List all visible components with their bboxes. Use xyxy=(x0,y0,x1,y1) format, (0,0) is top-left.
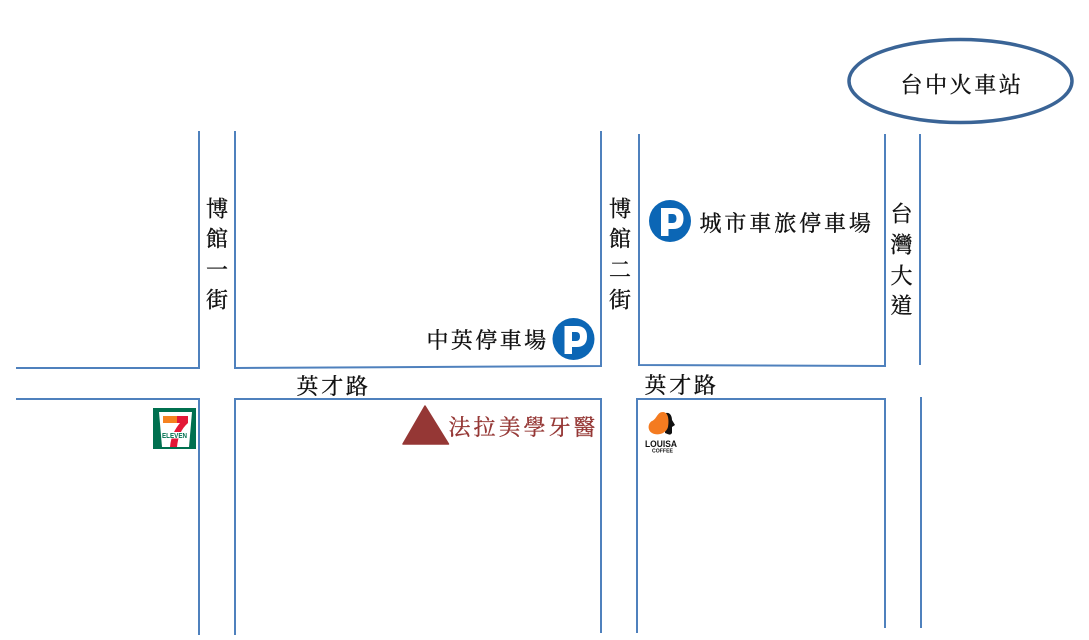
street label: Taiwan Blvd: 台 xyxy=(890,202,913,226)
street label: Yingcai Rd right: 英才路 xyxy=(644,373,719,398)
parking: Zhongying car park xyxy=(426,318,594,360)
destination marker: Fala dental clinic xyxy=(403,406,599,444)
destination marker: Fala dental clinic: 法拉美學牙醫 xyxy=(448,415,599,440)
logo: Louisa Coffee: LOUISA xyxy=(645,439,677,449)
landmark: Taichung station xyxy=(849,40,1072,122)
street label: Taiwan Blvd: 道 xyxy=(890,294,913,318)
street label: Bo Guan 1st St: 街 xyxy=(206,288,228,312)
road network xyxy=(16,131,921,635)
street label: Bo Guan 1st St: 館 xyxy=(206,226,228,252)
street label: Bo Guan 2nd St: 二 xyxy=(609,258,631,282)
parking: Zhongying car park: 中英停車場 xyxy=(426,328,549,353)
street label: Bo Guan 2nd St: 館 xyxy=(609,226,631,252)
logo: 7-Eleven xyxy=(153,408,196,449)
parking: City Hotel car park: 城市車旅停車場 xyxy=(700,211,874,236)
street label: Yingcai Rd left: 英才路 xyxy=(296,374,371,399)
parking: City Hotel car park xyxy=(649,200,874,242)
street label: Bo Guan 1st St: 博 xyxy=(206,196,228,222)
street label: Bo Guan 2nd St: 博 xyxy=(609,196,631,222)
street label: Bo Guan 1st St: 一 xyxy=(206,258,228,282)
logo: Louisa Coffee xyxy=(645,412,677,454)
street label: Taiwan Blvd: 大 xyxy=(890,264,913,288)
logo: 7-Eleven: ELEVEN xyxy=(162,433,187,440)
logo: Louisa Coffee: COFFEE xyxy=(652,448,674,454)
street label: Taiwan Blvd: 灣 xyxy=(890,232,913,258)
street label: Bo Guan 2nd St: 街 xyxy=(609,288,631,312)
landmark: Taichung station: 台中火車站 xyxy=(900,72,1024,98)
